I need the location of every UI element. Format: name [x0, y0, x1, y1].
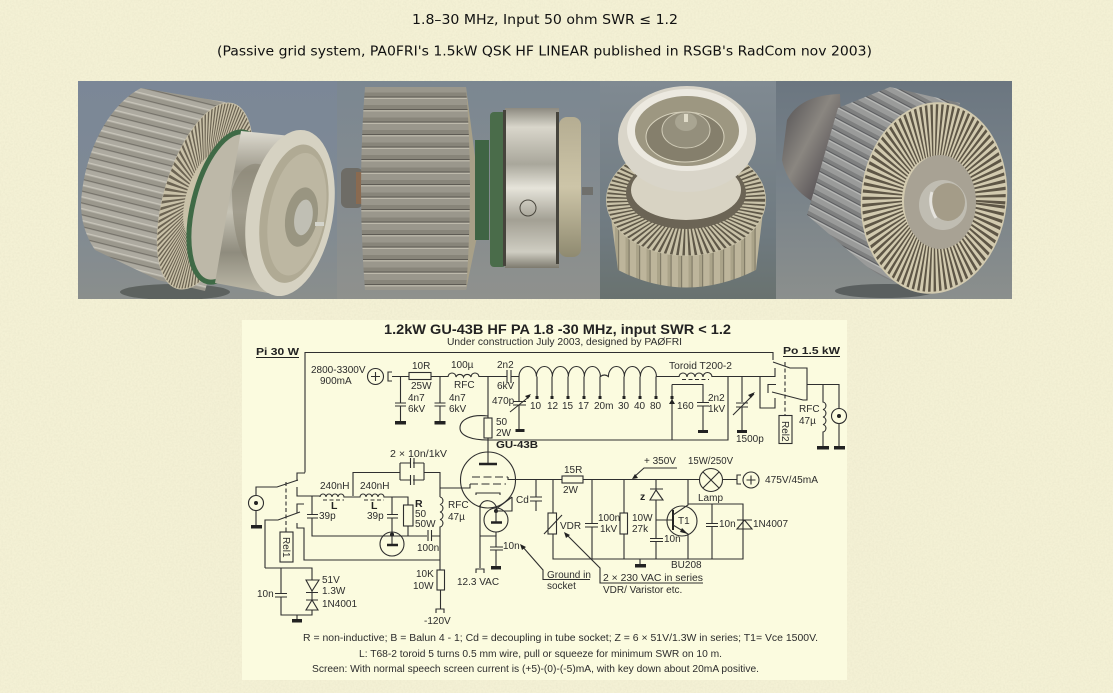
- input network: relay 1, L filter and grid resistor: 50W: [415, 519, 436, 530]
- tube GU-43B: 10n: [503, 541, 520, 552]
- photo 1: tube, three-quarter view: [78, 81, 347, 303]
- input network: relay 1, L filter and grid resistor: 1N4001: [322, 599, 357, 610]
- screen supply: zener, T1 and lamp: Lamp: [698, 493, 723, 504]
- screen supply: zener, T1 and lamp: + 350V: [644, 456, 676, 467]
- tube GU-43B: [457, 439, 562, 588]
- pi tank: band-switched coil: 470p: [492, 396, 515, 407]
- anode supply and decoupling: 4n7: [408, 393, 425, 404]
- callout: VDR varistor: [564, 532, 703, 596]
- relay 2 and output connector: [760, 362, 846, 450]
- note: screen current: Screen: With normal speech screen current is (+5)-(0)-(-5)mA, with key down about 20mA positive.: [312, 664, 759, 675]
- anode supply and decoupling: 6kV: [449, 404, 467, 415]
- schematic title: 1.2kW GU-43B HF PA 1.8 -30 MHz, input SWR < 1.2: [384, 322, 731, 337]
- relay 2 and output connector: 47µ: [799, 416, 816, 427]
- anode supply and decoupling: 4n7: [449, 393, 466, 404]
- callout: VDR varistor: VDR/ Varistor etc.: [603, 585, 682, 596]
- anode supply and decoupling: 25W: [411, 381, 432, 392]
- pi tank: band-switched coil: 160: [677, 401, 694, 412]
- panel: schematic diagram: [242, 320, 847, 680]
- photo 4: tube, fin face view: [776, 81, 1017, 301]
- input network: relay 1, L filter and grid resistor: RFC: [448, 500, 469, 511]
- input network: relay 1, L filter and grid resistor: 240nH: [320, 481, 349, 492]
- input network: relay 1, L filter and grid resistor: [248, 449, 470, 627]
- pi tank: band-switched coil: 17: [578, 401, 590, 412]
- pi tank: band-switched coil: 1500p: [736, 434, 764, 445]
- pi tank: band-switched coil: 10: [530, 401, 542, 412]
- input network: relay 1, L filter and grid resistor: 47µ: [448, 512, 465, 523]
- pi tank: band-switched coil: 2n2: [708, 393, 725, 404]
- heading: passive grid system: (Passive grid system, PA0FRI's 1.5kW QSK HF LINEAR published in RSGB's RadCom nov 2003): [217, 44, 872, 60]
- anode supply and decoupling: 6kV: [408, 404, 426, 415]
- screen supply: zener, T1 and lamp: BU208: [671, 560, 702, 571]
- screen supply: zener, T1 and lamp: 27k: [632, 524, 649, 535]
- callout: VDR varistor: 2 × 230 VAC in series: [603, 573, 703, 584]
- heading: frequency and SWR: 1.8–30 MHz, Input 50 ohm SWR ≤ 1.2: [412, 13, 678, 28]
- screen supply: zener, T1 and lamp: 10n: [719, 519, 736, 530]
- input network: relay 1, L filter and grid resistor: 39p: [367, 511, 384, 522]
- anode supply and decoupling: [305, 352, 773, 472]
- schematic subtitle: Under construction July 2003, designed by PAØFRI: [447, 337, 682, 348]
- input network: relay 1, L filter and grid resistor: 2 × 10n/1kV: [390, 449, 447, 460]
- callout: ground in socket: socket: [547, 581, 576, 592]
- input network: relay 1, L filter and grid resistor: 10K: [416, 569, 434, 580]
- anode supply and decoupling: 6kV: [497, 381, 515, 392]
- pi tank: band-switched coil: 15: [562, 401, 574, 412]
- relay 2 and output connector: RFC: [799, 404, 820, 415]
- input network: relay 1, L filter and grid resistor: R: [415, 498, 423, 510]
- screen supply: zener, T1 and lamp: T1: [678, 516, 690, 527]
- relay 2 and output connector: Rel2: [779, 421, 790, 442]
- input network: relay 1, L filter and grid resistor: -120V: [424, 616, 451, 627]
- photo 3: tube, top view: [600, 81, 776, 299]
- tube GU-43B: Cd: [516, 495, 529, 506]
- tube GU-43B: GU-43B: [496, 439, 538, 451]
- screen supply: zener, T1 and lamp: 1N4007: [753, 519, 788, 530]
- input network: relay 1, L filter and grid resistor: 1.3W: [322, 586, 346, 597]
- input network: relay 1, L filter and grid resistor: 240nH: [360, 481, 389, 492]
- input network: relay 1, L filter and grid resistor: 50: [415, 509, 427, 520]
- screen supply: zener, T1 and lamp: z: [640, 491, 645, 503]
- photo strip: GU-43B tube from four angles: [78, 81, 1017, 303]
- anode supply and decoupling: 2n2: [497, 360, 514, 371]
- screen supply: zener, T1 and lamp: 10W: [632, 513, 653, 524]
- pi tank: band-switched coil: 40: [634, 401, 646, 412]
- pi tank: band-switched coil: 80: [650, 401, 662, 412]
- pi tank: band-switched coil: 12: [547, 401, 559, 412]
- screen supply: zener, T1 and lamp: 100n: [598, 513, 620, 524]
- input network: relay 1, L filter and grid resistor: L: [331, 500, 338, 512]
- tube GU-43B: 12.3 VAC: [457, 577, 499, 588]
- screen supply: zener, T1 and lamp: 10n: [664, 534, 681, 545]
- anode supply and decoupling: 900mA: [320, 376, 352, 387]
- input network: relay 1, L filter and grid resistor: 51V: [322, 575, 340, 586]
- screen supply: zener, T1 and lamp: [544, 456, 818, 571]
- input network: relay 1, L filter and grid resistor: 10W: [413, 581, 434, 592]
- anode supply and decoupling: 10R: [412, 361, 430, 372]
- pi tank: band-switched coil: 2W: [496, 428, 512, 439]
- pi tank: band-switched coil: [460, 361, 775, 464]
- pi tank: band-switched coil: 20m: [594, 401, 613, 412]
- label: input power: Pi 30 W: [256, 346, 299, 358]
- pi tank: band-switched coil: 1kV: [708, 404, 726, 415]
- note: toroid winding: L: T68-2 toroid 5 turns 0.5 mm wire, pull or squeeze for minimum SWR on 10 m.: [359, 649, 722, 660]
- screen supply: zener, T1 and lamp: VDR: [560, 521, 581, 532]
- anode supply and decoupling: 100µ: [451, 360, 474, 371]
- screen supply: zener, T1 and lamp: 1kV: [600, 524, 618, 535]
- screen supply: zener, T1 and lamp: 15R: [564, 465, 582, 476]
- input network: relay 1, L filter and grid resistor: Rel1: [280, 537, 291, 558]
- label: output power: Po 1.5 kW: [783, 345, 840, 357]
- anode supply and decoupling: RFC: [454, 380, 475, 391]
- pi tank: band-switched coil: 50: [496, 417, 508, 428]
- photo 2: tube, side view: [337, 81, 600, 299]
- note: component key: R = non-inductive; B = Balun 4 - 1; Cd = decoupling in tube socket; Z = 6 × 51V/1.3W in series; T1= Vce 1500V.: [303, 633, 818, 644]
- pi tank: band-switched coil: 30: [618, 401, 630, 412]
- input network: relay 1, L filter and grid resistor: 39p: [319, 511, 336, 522]
- screen supply: zener, T1 and lamp: 475V/45mA: [765, 475, 818, 486]
- callout: ground in socket: Ground in: [547, 570, 591, 581]
- callout: ground in socket: [520, 544, 591, 592]
- anode supply and decoupling: 2800-3300V: [311, 365, 366, 376]
- input network: relay 1, L filter and grid resistor: L: [371, 500, 378, 512]
- input network: relay 1, L filter and grid resistor: 10n: [257, 589, 274, 600]
- pi tank: band-switched coil: Toroid T200-2: [669, 361, 732, 372]
- screen supply: zener, T1 and lamp: 15W/250V: [688, 456, 733, 467]
- input network: relay 1, L filter and grid resistor: 100n: [417, 543, 439, 554]
- screen supply: zener, T1 and lamp: 2W: [563, 485, 579, 496]
